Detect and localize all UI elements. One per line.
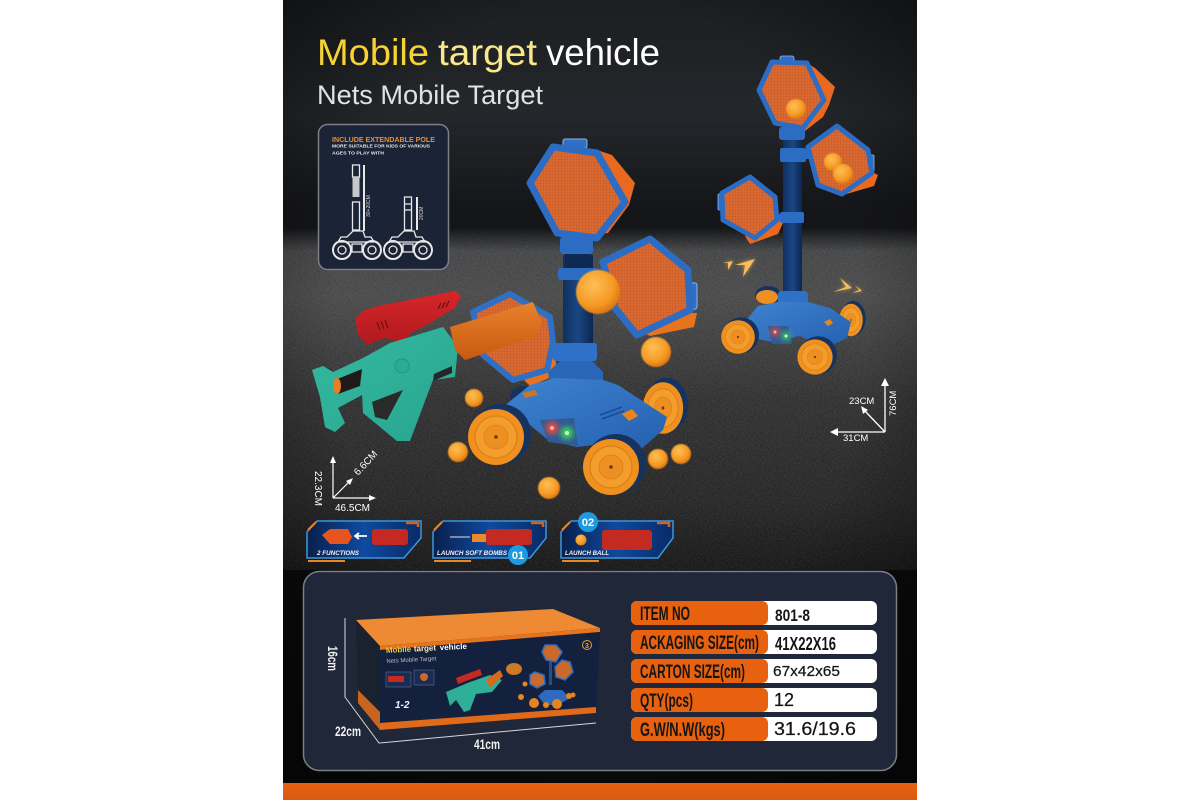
box art target [518,645,576,709]
ball and launcher [576,530,652,550]
feature card: 2 functions [307,521,421,561]
red scope [355,291,461,346]
box title: Mobile [386,645,412,655]
blaster dimensions: 6.6CM [352,449,380,478]
spec row: quantity: 12 [774,690,794,710]
box dimension lines [345,618,596,743]
box title: target [414,643,437,654]
spec row: weight: 31.6/19.6 [774,719,856,739]
extended length label: 30+20CM [366,195,372,217]
pole description: AGES TO PLAY WITH [332,150,385,156]
blaster toy [312,291,542,441]
LED lights [546,422,573,439]
main toy: target vehicle [448,139,697,499]
box art logo: 1-2 [395,700,410,711]
blaster dimensions [312,449,380,514]
soft bomb [322,529,352,544]
box title: Nets Mobile Target [386,656,437,665]
balls [448,270,691,499]
arrow [355,533,367,539]
spec row: item no: ITEM NO [640,604,690,625]
poster background [283,0,917,783]
feature card: launch soft bombs [433,521,546,565]
pole description: MORE SUITABLE FOR KIDS OF VARIOUS [332,144,431,150]
infographic canvas [283,0,917,800]
vehicle dimensions: 76CM [888,391,899,416]
pole [548,237,603,385]
panel: packaging [304,572,896,770]
bottom orange strip [283,783,917,800]
orange barrel [450,302,542,360]
caption: LAUNCH SOFT BOMBS [437,551,507,557]
extended pole diagram [333,165,381,259]
spec row: carton size: 67x42x65 [773,663,840,680]
spec row: carton size [631,659,877,683]
box art age badge: 3 [585,643,589,650]
product box illustration [356,609,600,730]
feature card: launch ball [561,512,673,561]
title: target [438,32,538,73]
subtitle: Nets Mobile Target [317,80,544,110]
box art age badge [582,640,592,650]
back wheels [510,378,688,434]
panel: extendable pole [318,124,448,270]
dimension arrows [836,383,885,432]
motion chevrons [723,259,862,293]
spec row: item no [631,601,877,625]
spec row: packaging size [631,630,877,654]
teal body [312,327,458,441]
title: Mobile [317,32,429,73]
left target [473,294,557,386]
blaster dimensions: 46.5CM [335,503,370,514]
dimension labels: 22.3CM [312,471,323,506]
vehicle dimensions: 31CM [843,433,868,444]
box dimension labels: 16cm [325,646,341,671]
box title [386,642,468,665]
spec row: weight: G.W/N.W(kgs) [640,720,725,741]
title: vehicle [546,32,660,73]
spec row: item no: 801-8 [775,606,810,625]
vehicle dimensions [830,378,899,444]
spec row: weight [631,717,877,741]
caption: 2 FUNCTIONS [316,551,359,557]
right target [808,126,878,195]
front wheels [468,404,646,495]
back wheels [755,286,866,336]
badge 02: 02 [582,517,594,529]
left target [718,177,783,244]
spec row: quantity: QTY(pcs) [640,691,693,712]
box dimension labels: 41cm [474,736,500,752]
caption: LAUNCH BALL [565,551,609,557]
box art thumbnails [386,670,434,687]
secondary toy: extended pole [718,56,878,375]
dimension labels: 23CM [849,396,874,407]
upper target [759,56,835,131]
pole description [332,144,431,156]
box title: vehicle [440,642,468,652]
pole heading: INCLUDE EXTENDABLE POLE [332,137,435,144]
spec row: packaging size: ACKAGING SIZE(cm) [640,633,759,654]
retracted length label: 20CM [419,207,425,220]
red launcher [372,529,408,545]
dimension arrows [333,460,372,498]
vehicle base [503,378,667,450]
box dimension labels: 22cm [335,723,361,739]
vehicle base [744,302,851,348]
top target [530,139,635,238]
spec row: carton size: CARTON SIZE(cm) [640,662,745,683]
LED lights [771,328,790,340]
front wheels [721,317,837,375]
right target [603,239,697,336]
box dimension labels [325,646,500,752]
spec row: packaging size: 41X22X16 [775,634,836,654]
title [317,32,660,73]
launcher firing [450,529,532,545]
spec row: quantity [631,688,877,712]
balls [786,99,853,184]
box art blaster [446,663,522,712]
retracted pole diagram [384,197,432,259]
long pole [776,127,812,307]
badge 01: 01 [512,550,524,562]
